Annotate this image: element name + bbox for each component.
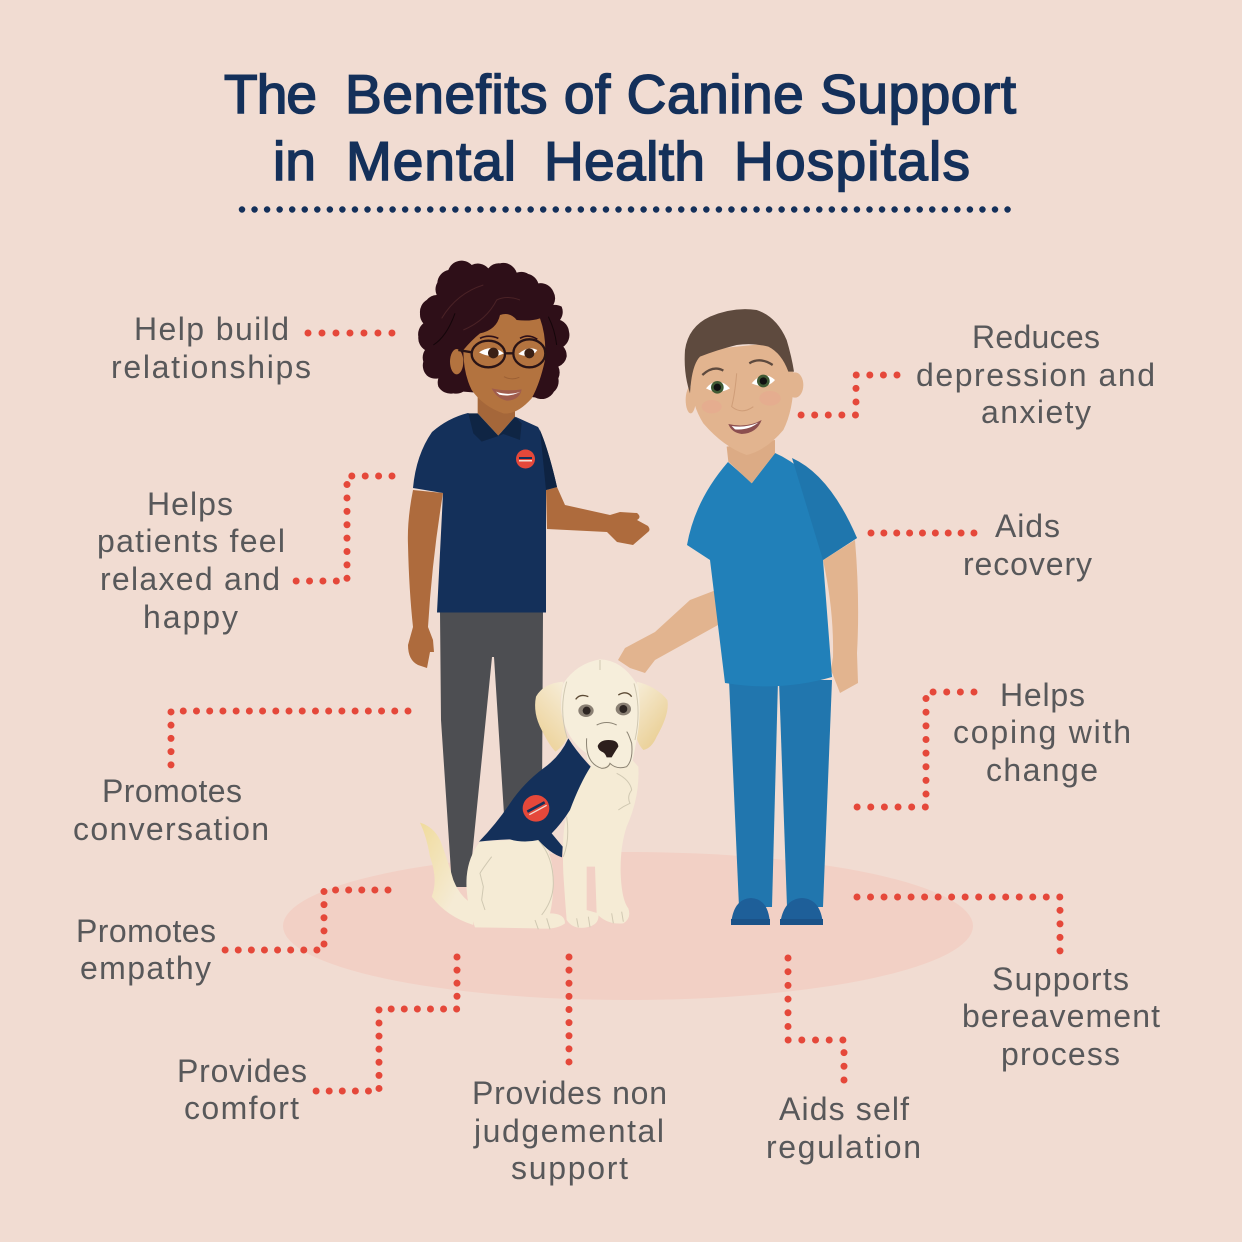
- dog fur lines: [480, 773, 632, 929]
- floor ellipse: [283, 852, 973, 1000]
- label: reduces depression: [916, 319, 1155, 430]
- connector: coping: [857, 692, 974, 807]
- label: helps patients feel relaxed: [97, 486, 285, 635]
- connector: relaxed: [296, 476, 392, 581]
- man face: [690, 343, 794, 455]
- label: non judgemental support: support: [511, 1150, 628, 1186]
- dog eyes: [576, 693, 632, 717]
- man ears: [787, 372, 803, 398]
- dog hind body: [466, 838, 565, 929]
- man neck: [727, 440, 775, 483]
- man hair: [685, 309, 794, 393]
- woman neck: [478, 397, 515, 436]
- dog chest and front legs: [563, 750, 639, 928]
- label: aids recovery: recovery: [963, 546, 1092, 582]
- dog head: [561, 659, 640, 767]
- dog muzzle: [587, 722, 632, 768]
- label: provides comfort: Provides: [177, 1053, 307, 1089]
- woman badge: [516, 450, 535, 468]
- label: helps coping: coping with: [953, 714, 1131, 750]
- woman trousers: [440, 612, 543, 887]
- dog tail: [420, 823, 473, 925]
- dog vest: [479, 738, 591, 857]
- woman hair: [418, 261, 569, 399]
- label: aids recovery: Aids: [995, 508, 1060, 544]
- man shoes: [731, 898, 770, 925]
- title: Benefits of Canine Support: [345, 63, 1016, 125]
- label: provides comfort: comfort: [184, 1090, 299, 1126]
- man trousers: [729, 680, 778, 907]
- label: promotes empathy: [76, 913, 216, 986]
- man sleeve shading: [792, 458, 857, 560]
- label: promotes conversation: conversation: [73, 811, 269, 847]
- label: help build relationships: Help build: [134, 311, 289, 347]
- title: [224, 63, 1016, 192]
- man mouth: [728, 420, 762, 434]
- woman eyes and glasses: [458, 336, 545, 367]
- man cheeks: [702, 400, 722, 413]
- label: reduces depression: depression and: [916, 357, 1155, 393]
- label: non judgemental support: Provides non: [472, 1075, 667, 1111]
- label: aids self regulation: regulation: [766, 1129, 921, 1165]
- connector: depression: [801, 375, 897, 415]
- label: helps patients feel relaxed: Helps: [147, 486, 233, 522]
- dog ears: [535, 682, 567, 752]
- woman face: [463, 314, 545, 413]
- label: supports bereavement: bereavement: [962, 998, 1160, 1034]
- label: helps coping: [953, 677, 1131, 788]
- label: aids self regulation: [766, 1091, 921, 1165]
- woman mouth: [492, 388, 522, 401]
- man head: [685, 309, 803, 483]
- title: Health: [544, 130, 705, 192]
- woman ear: [450, 349, 463, 374]
- label: aids recovery: [963, 508, 1092, 582]
- label: helps coping: Helps: [1000, 677, 1085, 713]
- title: Mental: [346, 130, 516, 192]
- figure: dog: [420, 659, 668, 929]
- woman nose: [504, 377, 519, 379]
- title: in: [273, 130, 316, 192]
- dog nose: [598, 740, 618, 757]
- man right arm: [823, 540, 858, 693]
- woman sleeve shade: [540, 430, 557, 490]
- label: aids self regulation: Aids self: [779, 1091, 909, 1127]
- woman head: [418, 261, 569, 442]
- connector: conversation: [171, 711, 408, 765]
- label: provides comfort: [177, 1053, 307, 1126]
- man shirt: [687, 453, 857, 686]
- figure: woman: [408, 261, 650, 887]
- title: Hospitals: [734, 130, 970, 192]
- connector: bereavement: [857, 897, 1060, 951]
- label: supports bereavement: Supports: [992, 961, 1129, 997]
- dog head outline: [563, 660, 638, 740]
- label: reduces depression: Reduces: [972, 319, 1100, 355]
- label: help build relationships: relationships: [111, 349, 311, 385]
- man eyes: [702, 360, 775, 394]
- label: promotes conversation: [73, 773, 269, 847]
- connector: help build: [308, 330, 392, 336]
- label: promotes conversation: Promotes: [102, 773, 242, 809]
- connector: non judgemental: [566, 957, 572, 1062]
- man nose: [732, 373, 753, 411]
- woman collar: [468, 413, 522, 442]
- woman left arm: [408, 490, 443, 668]
- label: helps patients feel relaxed: happy: [143, 599, 238, 635]
- man left arm and hand: [618, 590, 718, 673]
- label: supports bereavement: process: [1001, 1036, 1120, 1072]
- label: reduces depression: anxiety: [981, 394, 1091, 430]
- label: helps coping: change: [986, 752, 1098, 788]
- woman right arm and hand: [546, 487, 650, 545]
- figure: man: [618, 309, 858, 925]
- label: supports bereavement: [962, 961, 1160, 1072]
- connector: self regulation: [788, 958, 844, 1080]
- connector: comfort: [316, 957, 457, 1091]
- label: non judgemental support: [472, 1075, 667, 1186]
- title dotted underline: [242, 206, 1008, 213]
- woman hair strands: [442, 285, 520, 330]
- dog vest badge: [523, 795, 549, 822]
- title: The: [224, 63, 317, 125]
- label: helps patients feel relaxed: patients feel: [97, 523, 285, 559]
- label: non judgemental support: judgemental: [473, 1113, 664, 1149]
- label: help build relationships: [111, 311, 311, 385]
- woman shirt: [413, 413, 557, 612]
- connector: empathy: [225, 890, 388, 950]
- connector: recovery: [871, 530, 974, 536]
- label: promotes empathy: empathy: [80, 950, 211, 986]
- label: promotes empathy: Promotes: [76, 913, 216, 949]
- label: helps patients feel relaxed: relaxed and: [100, 561, 280, 597]
